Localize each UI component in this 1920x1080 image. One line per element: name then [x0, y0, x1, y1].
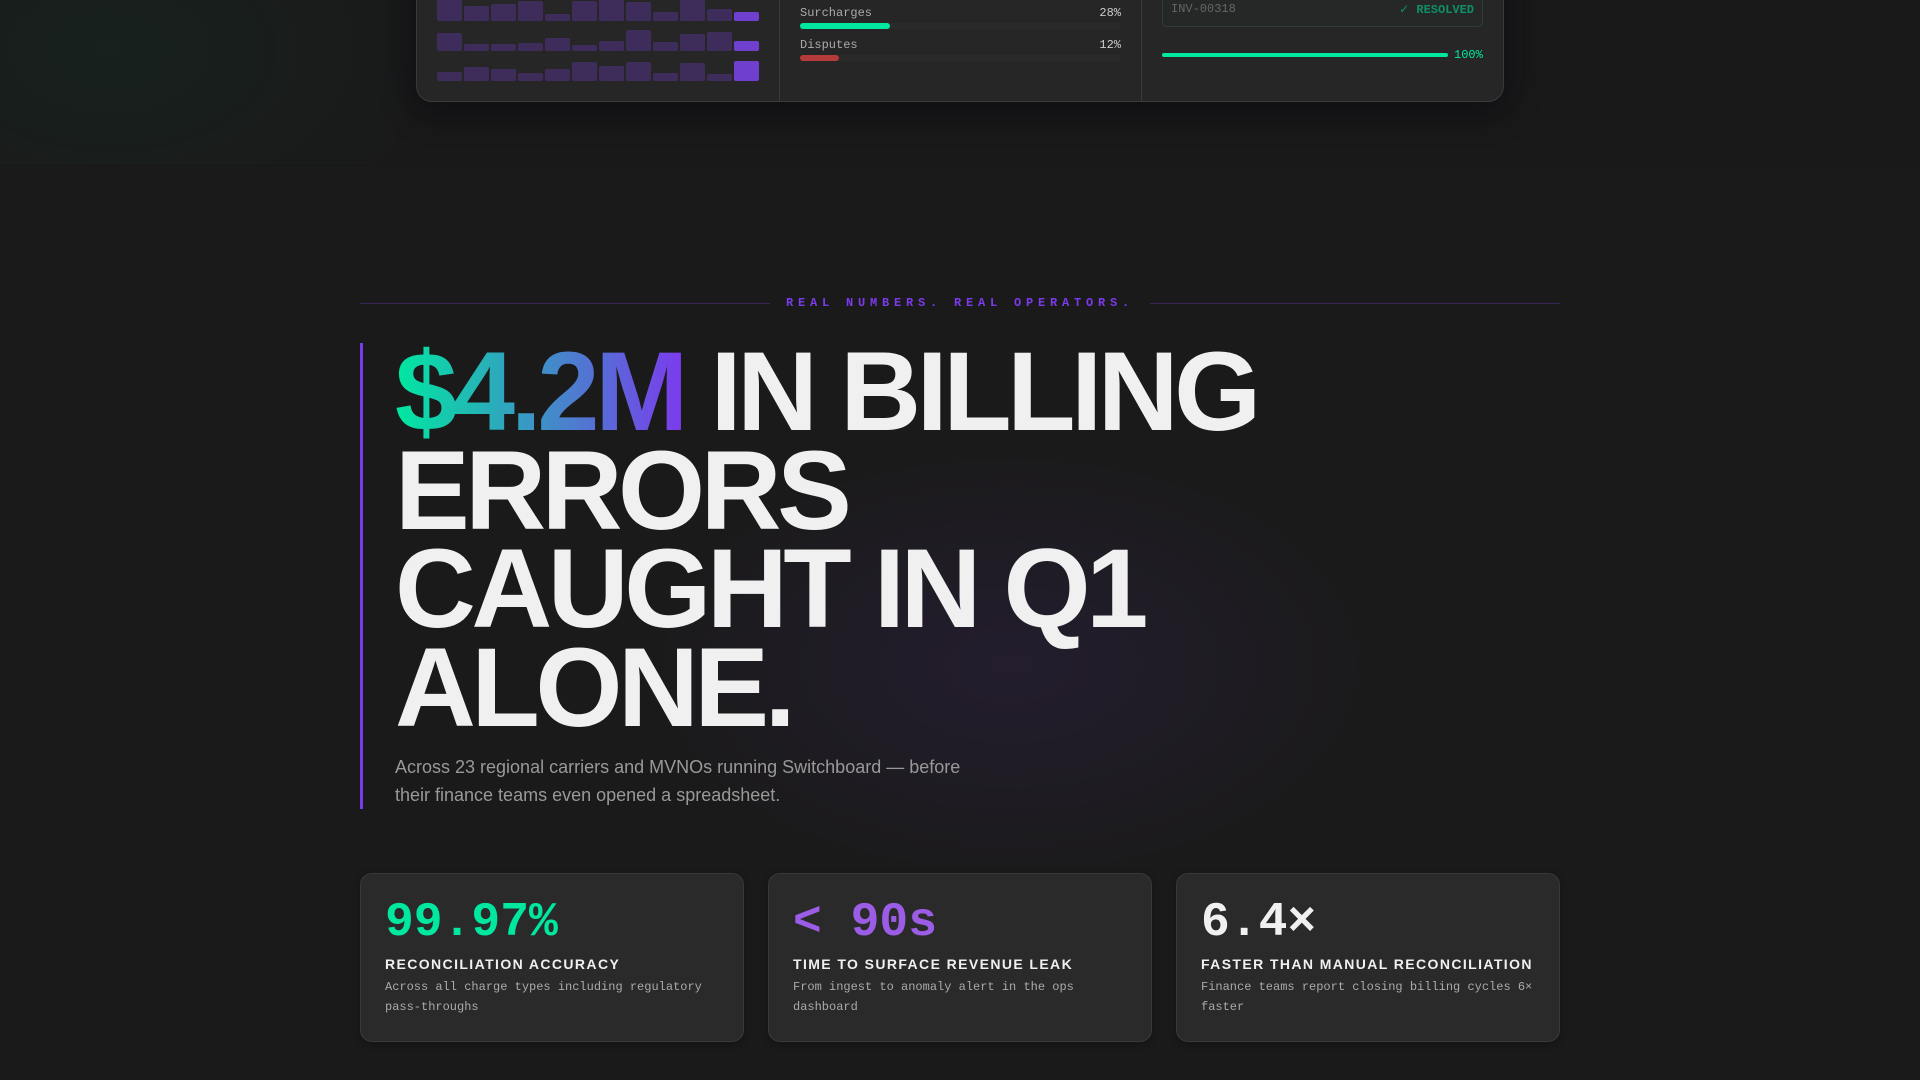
charge row: surcharges [800, 6, 1121, 29]
charge row: disputes: 12% [1099, 38, 1121, 52]
headline: CAUGHT IN Q1 [395, 526, 1144, 651]
resolved status: ✓ RESOLVED [1399, 2, 1474, 17]
invoice row: resolved [1162, 0, 1483, 27]
hero background with green glow [0, 0, 1920, 166]
panel column: charge breakdown [780, 0, 1142, 101]
bar chart: usage by period [437, 0, 759, 81]
stat description: Across all charge types including regulatory pass-throughs [385, 980, 702, 1014]
panel column: usage heatmap [417, 0, 780, 101]
stat value: 99.97% [385, 896, 558, 950]
stat description: Finance teams report closing billing cycles 6× faster [1201, 980, 1532, 1014]
headline: $4.2M IN BILLING [395, 329, 1257, 454]
stat label: RECONCILIATION ACCURACY [385, 956, 620, 972]
charge row: surcharges: Surcharges [800, 6, 872, 20]
headline: ALONE. [395, 625, 791, 750]
subheading: their finance teams even opened a spreadsheet. [395, 785, 780, 805]
progress bar [1162, 53, 1448, 57]
stat value: 6.4× [1201, 896, 1316, 950]
subheading: Across 23 regional carriers and MVNOs running Switchboard — before [395, 757, 960, 777]
stat card: accuracy [360, 873, 744, 1042]
subheading [395, 757, 960, 805]
stat card: time to surface [768, 873, 1152, 1042]
panel column: invoice resolution [1162, 0, 1483, 62]
stat label: FASTER THAN MANUAL RECONCILIATION [1201, 956, 1533, 972]
headline [395, 329, 1257, 750]
charge row: disputes: Disputes [800, 38, 858, 52]
charge row: disputes [800, 38, 1121, 61]
stat card: speed [1176, 873, 1560, 1042]
stat value: < 90s [793, 896, 937, 950]
progress value: 100% [1454, 48, 1483, 62]
charge row: surcharges: 28% [1099, 6, 1121, 20]
stat description: From ingest to anomaly alert in the ops dashboard [793, 980, 1074, 1014]
invoice id: INV-00318 [1171, 2, 1236, 16]
headline block with accent rule [360, 343, 1560, 809]
purple ambient glow [500, 380, 1500, 980]
stat label: TIME TO SURFACE REVENUE LEAK [793, 956, 1073, 972]
section eyebrow: real numbers, real operators: REAL NUMBERS. REAL OPERATORS. [786, 296, 1134, 310]
headline: ERRORS [395, 428, 847, 553]
panel: product dashboard mockup [416, 0, 1504, 102]
